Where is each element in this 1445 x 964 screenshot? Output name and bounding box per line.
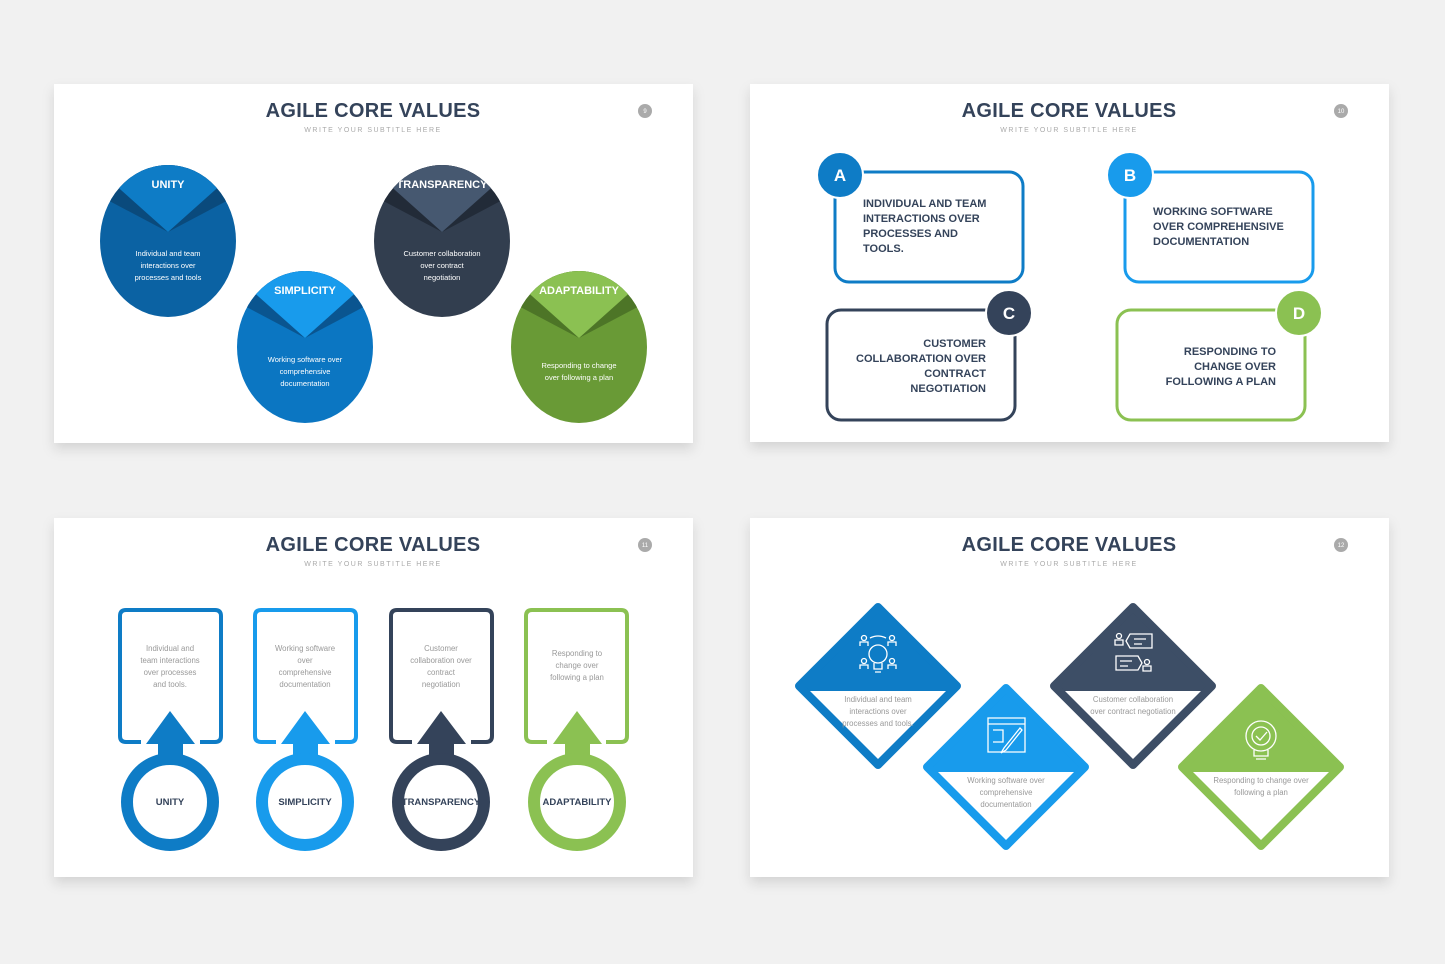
diamond 4: following a plan [1234, 788, 1288, 797]
icon: bulb check [1246, 721, 1276, 759]
item: adaptability [526, 610, 627, 845]
box A: A [834, 166, 846, 185]
circle: adaptability: ADAPTABILITY [539, 285, 620, 297]
circle: simplicity: Working software over [268, 355, 343, 364]
box D [1117, 290, 1322, 420]
diamond 4 [1182, 688, 1340, 846]
circle: simplicity: documentation [280, 379, 330, 388]
diamond 3: Customer collaboration [1093, 695, 1173, 704]
circle: transparency: over contract [420, 261, 465, 270]
box B [1107, 152, 1313, 282]
page number: 11 [642, 543, 649, 549]
panel: slide 10 lettered boxes [750, 84, 1389, 442]
box A: INDIVIDUAL AND TEAM [863, 198, 986, 210]
circle: unity: processes and tools [135, 273, 202, 282]
circle: simplicity: comprehensive [280, 367, 330, 376]
diamond 3: over contract negotiation [1090, 707, 1176, 716]
box A: TOOLS. [863, 243, 904, 255]
circle: unity: Individual and team [135, 249, 201, 258]
subtitle: WRITE YOUR SUBTITLE HERE [304, 561, 442, 568]
page number: 10 [1338, 109, 1345, 115]
box D: FOLLOWING A PLAN [1166, 376, 1276, 388]
item: simplicity [255, 610, 356, 845]
box A: INTERACTIONS OVER [863, 213, 980, 225]
circle: unity [100, 165, 236, 318]
box B: OVER COMPREHENSIVE [1153, 221, 1284, 233]
circle: transparency: negotiation [424, 273, 460, 282]
item: transparency [391, 610, 492, 845]
diamond 4: Responding to change over [1213, 776, 1309, 785]
circle: unity: UNITY [152, 179, 185, 191]
subtitle: WRITE YOUR SUBTITLE HERE [1000, 561, 1138, 568]
item: transparency: Customer [424, 644, 458, 653]
subtitle: WRITE YOUR SUBTITLE HERE [304, 127, 442, 134]
item: simplicity: comprehensive [279, 668, 331, 677]
diamond 3 [1054, 607, 1212, 765]
circle: adaptability: over following a plan [545, 373, 613, 382]
item: transparency: negotiation [422, 680, 460, 689]
icon: chat [1115, 634, 1152, 671]
page number [638, 538, 652, 552]
item: unity: Individual and [146, 644, 194, 653]
item: adaptability: ADAPTABILITY [543, 797, 612, 808]
circle: transparency [374, 165, 510, 318]
panel: slide 12 diamonds [750, 518, 1389, 877]
box C [827, 290, 1032, 420]
box D: RESPONDING TO [1184, 346, 1276, 358]
circle: adaptability: Responding to change [541, 361, 617, 370]
title: AGILE CORE VALUES [266, 100, 480, 122]
page number: 9 [643, 109, 647, 115]
item: unity: and tools. [153, 680, 187, 689]
panel: slide 11 arrows [54, 518, 693, 877]
box D: CHANGE OVER [1194, 361, 1276, 373]
diamond 1: interactions over [849, 707, 907, 716]
page number: 12 [1338, 543, 1345, 549]
circle: transparency: TRANSPARENCY [397, 179, 488, 191]
box A: PROCESSES AND [863, 228, 958, 240]
box A [817, 152, 1023, 282]
title: AGILE CORE VALUES [962, 100, 1176, 122]
item: simplicity: over [297, 656, 313, 665]
diamond 2 [927, 688, 1085, 846]
box B: WORKING SOFTWARE [1153, 206, 1273, 218]
circle: adaptability [511, 271, 647, 424]
item: simplicity: Working software [275, 644, 335, 653]
page number [1334, 538, 1348, 552]
diamond 2: Working software over [967, 776, 1045, 785]
box C: CONTRACT [924, 368, 986, 380]
item: simplicity: documentation [279, 680, 331, 689]
item: transparency: contract [427, 668, 456, 677]
panel: slide 9 circles [54, 84, 693, 443]
circle: unity: interactions over [140, 261, 196, 270]
item: transparency: collaboration over [410, 656, 472, 665]
icon: document edit [988, 718, 1025, 753]
box C: NEGOTIATION [910, 383, 986, 395]
page number [638, 104, 652, 118]
box C: CUSTOMER [923, 338, 986, 350]
box B: DOCUMENTATION [1153, 236, 1249, 248]
item: unity [120, 610, 221, 845]
item: unity: over processes [144, 668, 197, 677]
icon: idea team [860, 636, 896, 672]
item: unity: team interactions [140, 656, 200, 665]
page number [1334, 104, 1348, 118]
circle: transparency: Customer collaboration [403, 249, 481, 258]
diamond 1 [799, 607, 957, 765]
diamond 1: processes and tools. [842, 719, 914, 728]
title: AGILE CORE VALUES [962, 534, 1176, 556]
box C: C [1003, 304, 1015, 323]
box D: D [1293, 304, 1305, 323]
item: adaptability: change over [556, 661, 599, 670]
item: unity: UNITY [156, 797, 185, 808]
subtitle: WRITE YOUR SUBTITLE HERE [1000, 127, 1138, 134]
box B: B [1124, 166, 1136, 185]
circle: simplicity: SIMPLICITY [274, 285, 337, 297]
diamond 1: Individual and team [844, 695, 912, 704]
box C: COLLABORATION OVER [856, 353, 986, 365]
item: adaptability: Responding to [552, 649, 603, 658]
circle: simplicity [237, 271, 373, 424]
diamond 2: comprehensive [980, 788, 1032, 797]
item: transparency: TRANSPARENCY [402, 797, 481, 808]
title: AGILE CORE VALUES [266, 534, 480, 556]
diamond 2: documentation [980, 800, 1032, 809]
item: simplicity: SIMPLICITY [278, 797, 332, 808]
item: adaptability: following a plan [550, 673, 604, 682]
